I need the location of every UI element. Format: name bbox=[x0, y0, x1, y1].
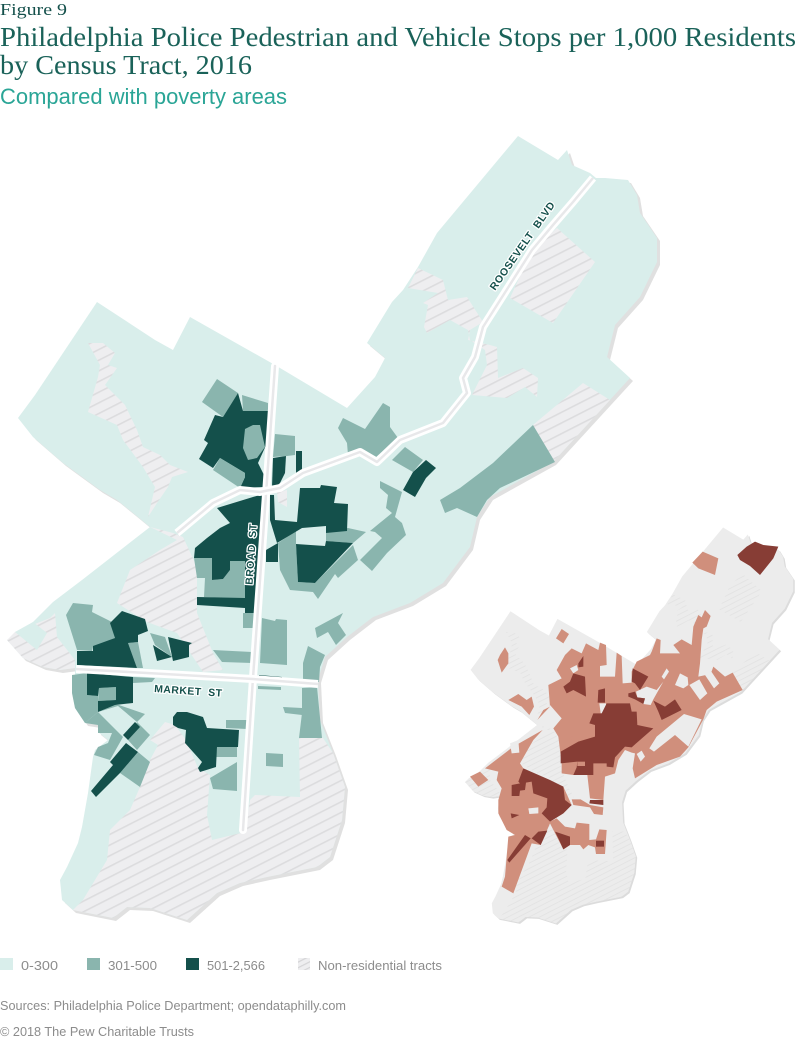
road: Market St bbox=[76, 669, 318, 684]
legend label 301-500: 301-500 bbox=[108, 958, 157, 973]
lighter patches within deep poverty bbox=[568, 735, 585, 766]
road: Broad St bbox=[243, 366, 275, 830]
tracts 501-2,566 bbox=[77, 393, 436, 797]
tract patch below north tract bbox=[213, 458, 245, 488]
legend label 0-300: 0-300 bbox=[21, 958, 58, 973]
map shadow bbox=[10, 139, 660, 923]
non-residential hatched tracts bbox=[7, 228, 610, 920]
small map: poverty areas bbox=[465, 527, 795, 925]
poverty tracts bbox=[470, 542, 778, 893]
residential tracts 0-300 base bbox=[7, 136, 657, 920]
legend bbox=[0, 958, 443, 973]
label: Broad St: BROAD ST bbox=[244, 523, 260, 585]
legend label non-residential: Non-residential tracts bbox=[318, 958, 443, 973]
gaps in poverty areas bbox=[510, 665, 719, 814]
label: Roosevelt Blvd: ROOSEVELT BLVD bbox=[488, 199, 558, 293]
tract patch inside dark area bbox=[243, 425, 265, 460]
legend swatch 301-500 bbox=[87, 958, 100, 970]
figure label: Figure 9 bbox=[0, 0, 67, 19]
legend swatch non-residential bbox=[298, 958, 310, 970]
light tract patch bbox=[15, 622, 47, 650]
small map shadow bbox=[467, 529, 795, 925]
label: Market St: MARKET ST bbox=[154, 683, 223, 700]
small map hatched tracts bbox=[465, 574, 770, 923]
source note: Sources: Philadelphia Police Department; opendataphilly.com bbox=[0, 999, 346, 1013]
subtitle: Compared with poverty areas bbox=[0, 84, 287, 109]
title: by Census Tract, 2016 bbox=[0, 49, 252, 80]
main map: police stops by census tract bbox=[7, 136, 660, 923]
legend swatch 501-2,566 bbox=[186, 958, 199, 970]
title bbox=[0, 21, 796, 80]
lighter poverty areas bbox=[470, 552, 743, 893]
road: Roosevelt Blvd bbox=[177, 178, 593, 533]
small map base bbox=[465, 527, 793, 923]
legend swatch 0-300 bbox=[0, 958, 13, 970]
tracts 301-500 bbox=[66, 379, 555, 791]
legend label 501-2,566: 501-2,566 bbox=[207, 958, 265, 973]
title: Philadelphia Police Pedestrian and Vehicle Stops per 1,000 Residents bbox=[0, 21, 796, 52]
deep poverty areas bbox=[507, 542, 778, 863]
